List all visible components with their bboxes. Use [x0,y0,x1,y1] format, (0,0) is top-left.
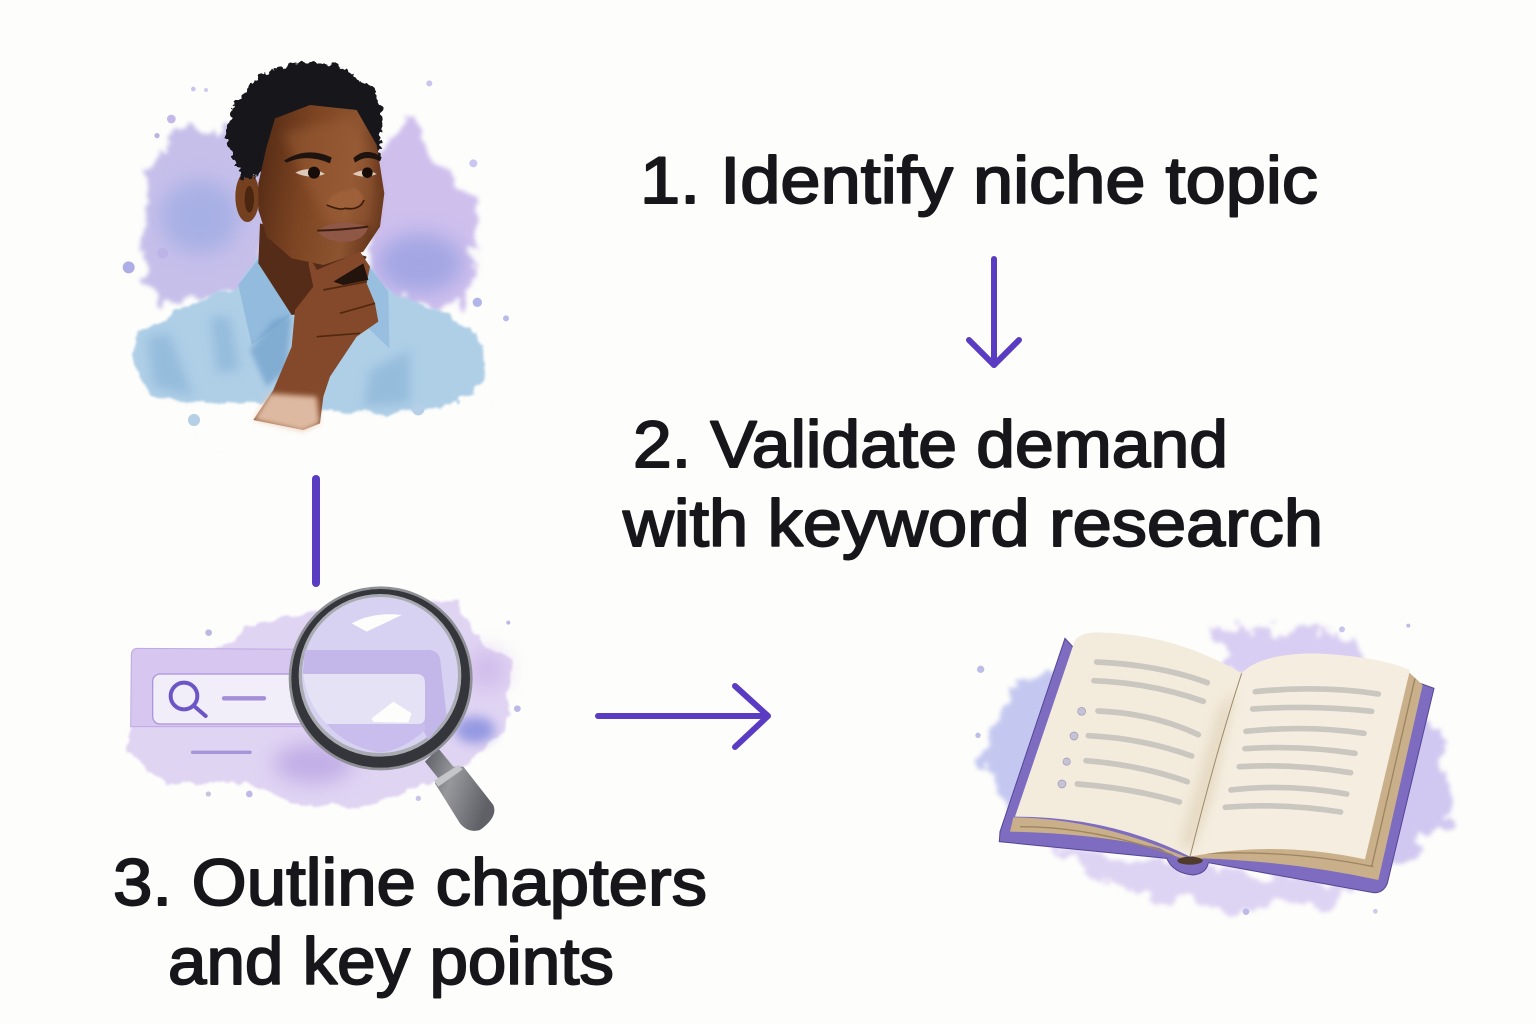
spine knot [1177,857,1203,865]
book cover [999,638,1434,893]
connector line: step 2 to step 3 [312,479,320,583]
left page [1015,632,1242,857]
placeholder lines [193,698,264,752]
ear [235,171,259,222]
watercolor splash behind search [127,600,521,808]
lips [317,222,368,242]
magnifying glass [289,586,494,831]
step 3 heading [113,845,707,998]
neck [258,223,367,315]
right page [1190,653,1410,859]
handle [425,748,494,831]
search input [153,674,425,724]
illustration: search bar and magnifying glass [127,586,521,831]
bullets [1058,707,1086,788]
watercolor splash behind book [975,624,1450,915]
text lines left page [1077,662,1207,802]
eyebrows [284,152,382,163]
text lines right page [1225,689,1378,812]
step 2 heading [622,407,1323,560]
nose [327,188,364,209]
face [258,105,384,265]
step 2 heading: with keyword research [622,486,1323,560]
frame [289,586,473,770]
watercolor splash behind man [123,80,509,321]
step 1 heading: 1. Identify niche topic [640,143,1318,217]
page edges [1010,672,1423,880]
step 2 heading: 2. Validate demand [633,407,1228,481]
arrow: step 3 to book [598,686,768,747]
shirt bottom splashes [118,393,493,452]
step 3 heading: and key points [168,924,614,998]
hand [253,252,378,430]
eyes [295,169,377,177]
lens [302,597,458,753]
illustration: thinking man with watercolor backdrop [118,63,509,452]
step 3 heading: 3. Outline chapters [113,845,707,919]
shirt [130,257,485,413]
arrow: step 1 to step 2 [969,259,1019,365]
icon: search glass [171,683,206,716]
illustration: open book [975,624,1450,915]
search bar panel [131,648,441,727]
hair [225,63,383,178]
